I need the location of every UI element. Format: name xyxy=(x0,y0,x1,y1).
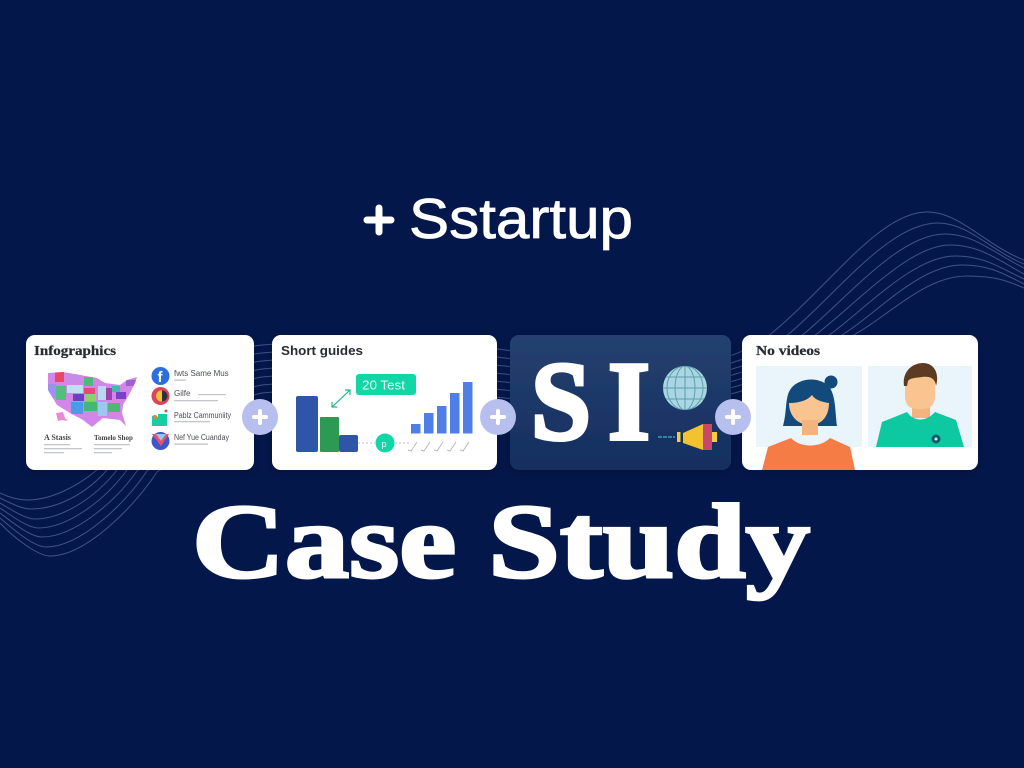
list item: shield: Nef Yue Cuanday xyxy=(174,433,229,442)
bar chart xyxy=(411,382,472,434)
list item: circle chart: Gilfe xyxy=(174,389,191,398)
axis ticks xyxy=(408,442,469,451)
list item: shield xyxy=(152,432,229,450)
main heading: Case Study xyxy=(192,483,810,600)
list item: green block: Pablz Cammuniity xyxy=(174,411,231,420)
panel: no videos xyxy=(742,335,978,470)
plus connector 3 xyxy=(715,399,751,435)
caption: left xyxy=(44,433,82,453)
card background xyxy=(26,335,254,470)
list item: facebook: f xyxy=(158,369,164,386)
arrow xyxy=(332,390,350,407)
heading: Short guides xyxy=(281,343,363,358)
list item: circle chart xyxy=(152,387,226,405)
card background xyxy=(272,335,497,470)
heading: No videos xyxy=(756,344,821,359)
big letters: S xyxy=(531,340,591,464)
list item: facebook xyxy=(152,367,229,386)
connector node: p xyxy=(382,439,387,449)
alaska xyxy=(56,412,68,421)
decorative wave lines xyxy=(0,212,1024,556)
panel: infographics xyxy=(26,335,254,470)
panel: SI xyxy=(510,335,731,470)
portrait: man xyxy=(868,363,972,447)
caption: right: Tomelo Shop xyxy=(94,434,133,442)
icon: plus xyxy=(367,208,391,232)
brand title xyxy=(367,187,633,251)
card background xyxy=(742,335,978,470)
icon: megaphone xyxy=(658,424,717,450)
icon: globe xyxy=(663,366,707,410)
connector node xyxy=(358,434,410,452)
plus connector 1 xyxy=(242,399,278,435)
card background xyxy=(510,335,731,470)
map of the USA xyxy=(48,372,137,427)
brand name: Sstartup xyxy=(409,187,633,251)
stacked bars xyxy=(296,396,358,452)
badge xyxy=(356,374,416,395)
badge: 20 Test xyxy=(362,378,405,392)
big letters: I xyxy=(608,340,650,464)
list item: facebook: fwts Same Mus xyxy=(174,369,229,378)
caption: left: A Stasis xyxy=(44,433,71,442)
list item: green block xyxy=(152,410,231,426)
plus connector 2 xyxy=(480,399,516,435)
portrait: woman xyxy=(756,366,862,470)
caption: right xyxy=(94,434,133,453)
panel: short guides xyxy=(272,335,497,470)
big letters xyxy=(531,340,650,464)
heading: Infographics xyxy=(34,344,117,359)
